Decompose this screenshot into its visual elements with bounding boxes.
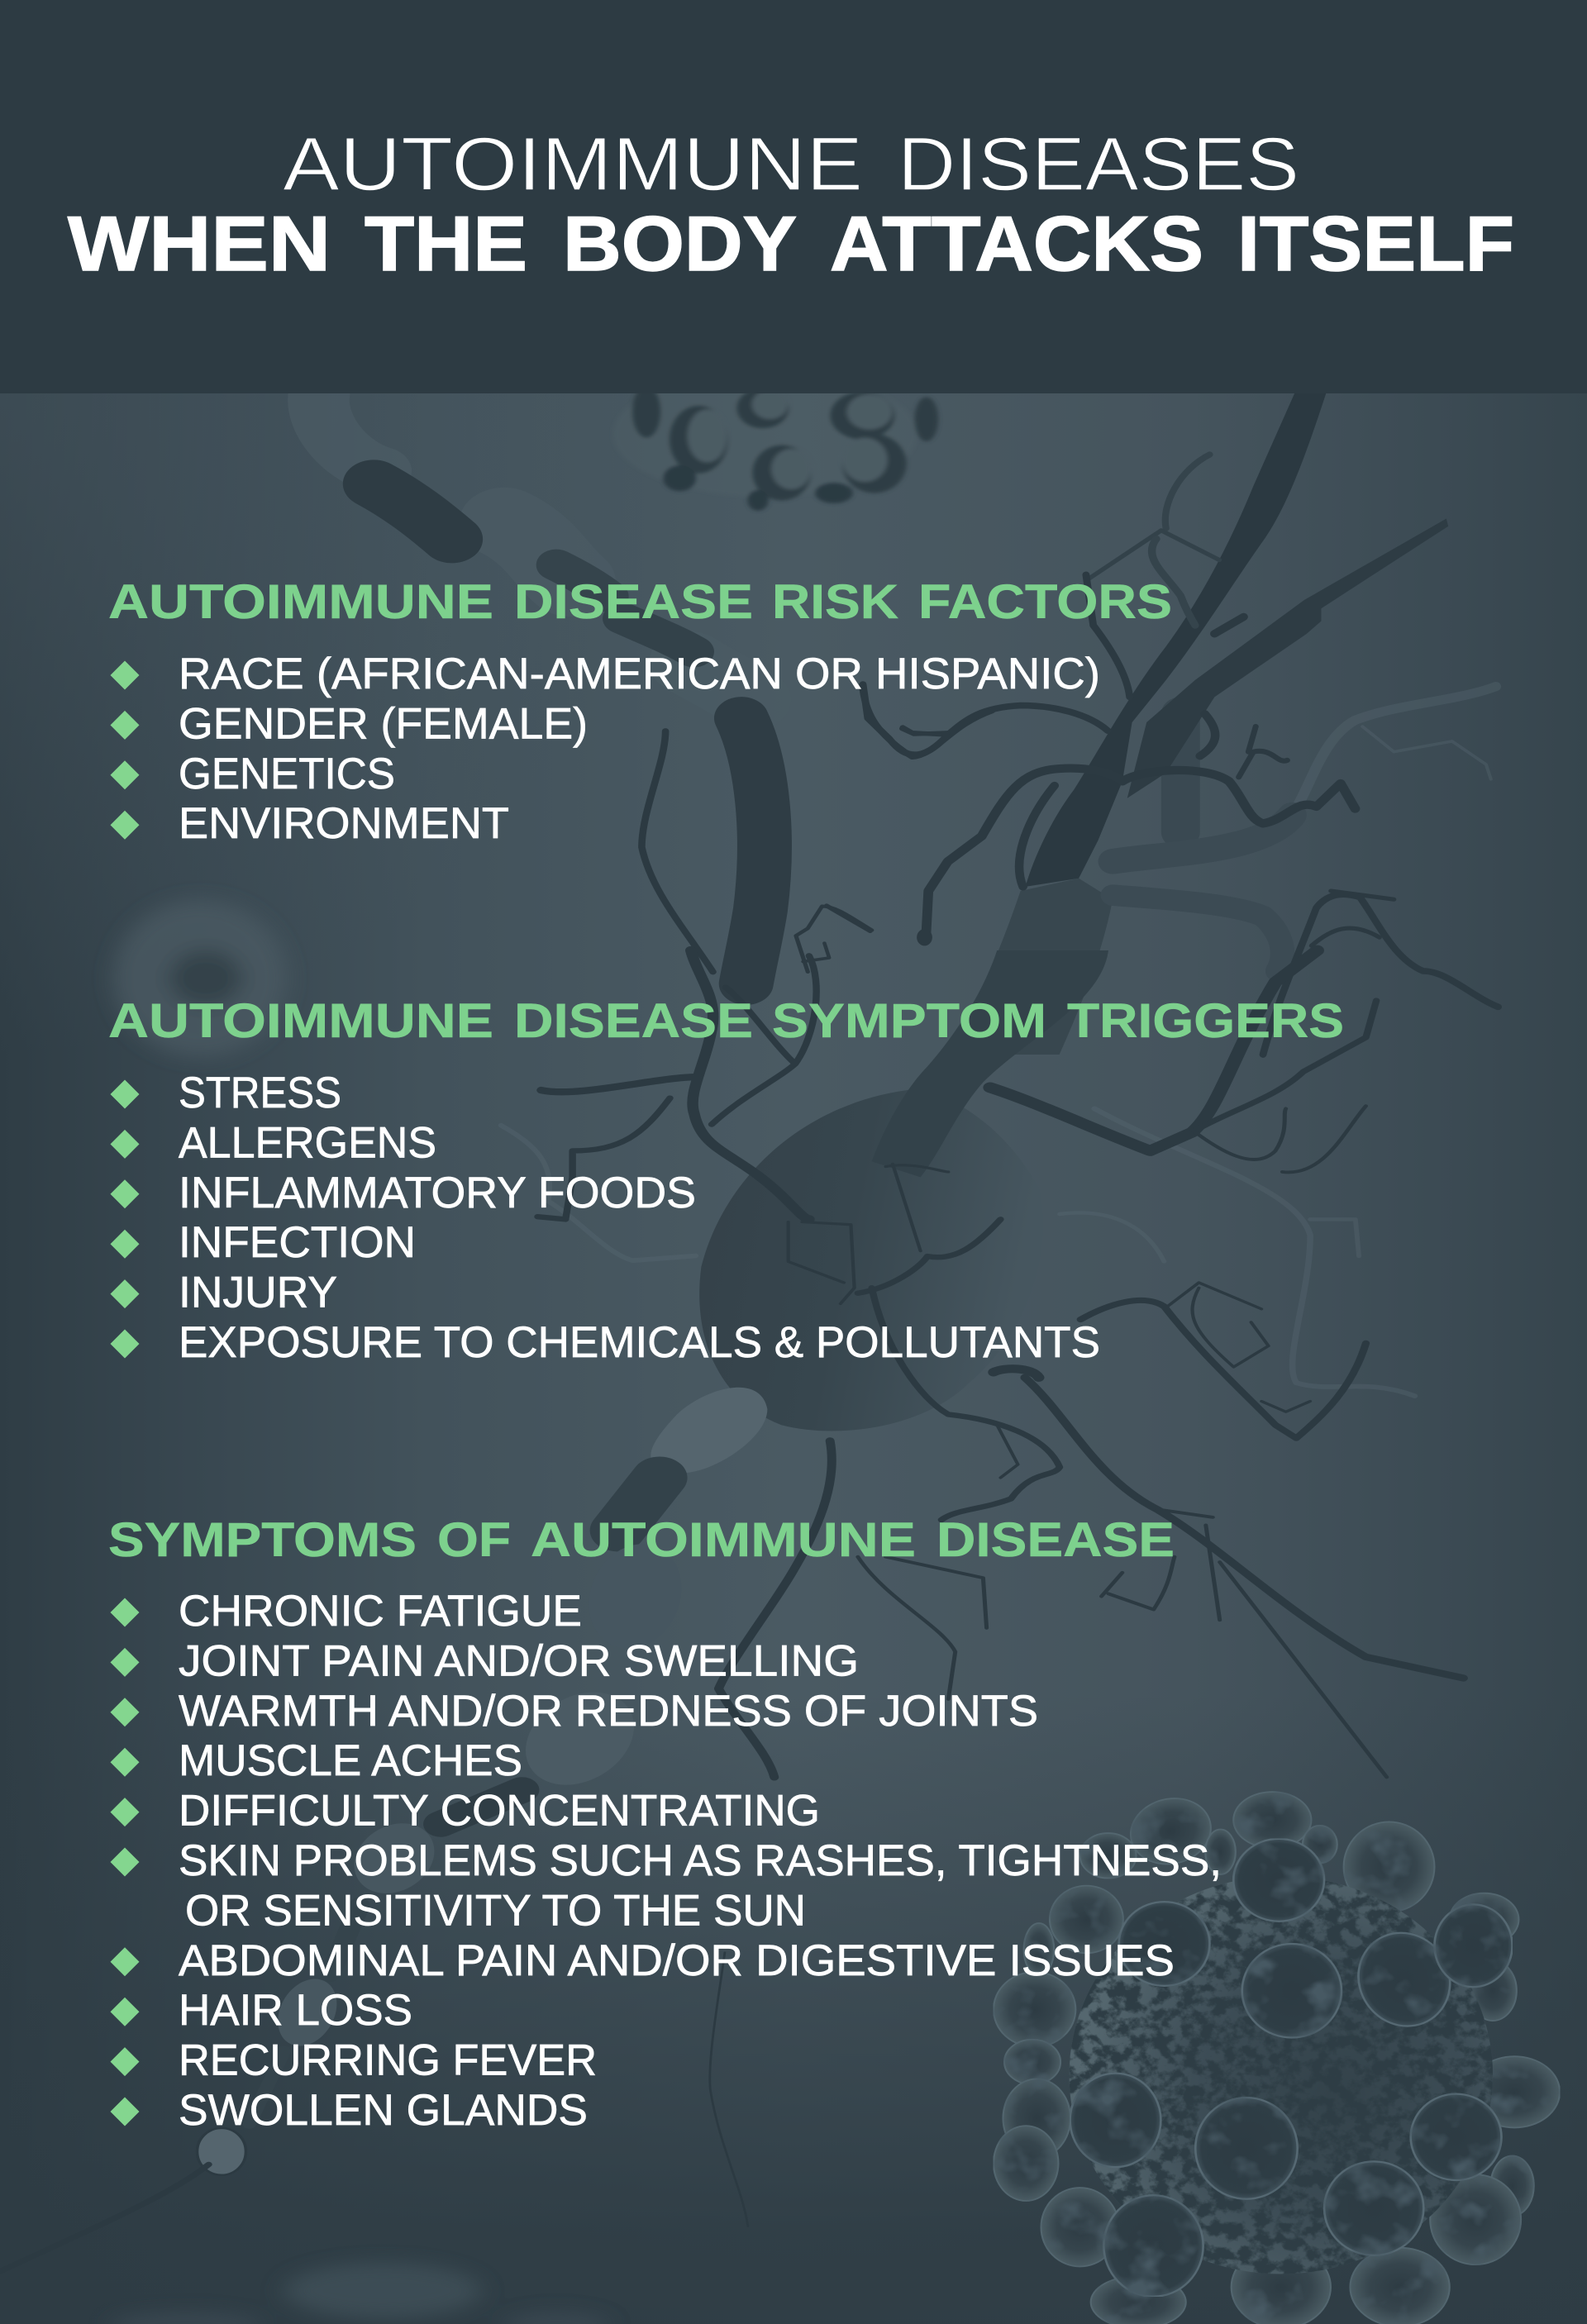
virus sphere — [1070, 1876, 1493, 2274]
item: SKIN PROBLEMS SUCH AS RASHES, TIGHTNESS, — [179, 1836, 1222, 1885]
item: HAIR LOSS — [179, 1986, 412, 2035]
front discs — [1070, 1839, 1513, 2297]
title line one: AUTOIMMUNE — [283, 122, 863, 207]
item: STRESS — [179, 1069, 341, 1117]
item: ABDOMINAL PAIN AND/OR DIGESTIVE ISSUES — [179, 1936, 1175, 1985]
item: INFECTION — [179, 1218, 416, 1267]
heading: symptoms: DISEASE — [936, 1513, 1175, 1567]
item: GENDER (FEMALE) — [179, 699, 588, 748]
item: OR SENSITIVITY TO THE SUN — [185, 1886, 806, 1935]
title line two — [68, 200, 1514, 287]
item: DIFFICULTY CONCENTRATING — [179, 1787, 820, 1836]
item: EXPOSURE TO CHEMICALS & POLLUTANTS — [179, 1318, 1100, 1367]
heading: risk factors — [108, 575, 1172, 629]
item: RECURRING FEVER — [179, 2036, 597, 2085]
title line two: BODY — [563, 200, 797, 287]
heading: risk factors: RISK — [772, 575, 898, 629]
capsule: beside heading — [579, 1539, 692, 1655]
dark rod: below capsule — [617, 1478, 660, 1531]
heading: symptoms: SYMPTOMS — [108, 1513, 417, 1567]
heading: symptoms: OF — [437, 1513, 511, 1567]
heading: symptom triggers: DISEASE — [514, 994, 753, 1048]
blurred virus: top — [613, 371, 938, 511]
header band — [0, 0, 1587, 393]
item — [111, 1836, 1222, 1935]
item: WARMTH AND/OR REDNESS OF JOINTS — [179, 1687, 1038, 1736]
item — [111, 1269, 337, 1317]
item: MUSCLE ACHES — [179, 1736, 522, 1785]
item: GENETICS — [179, 750, 395, 798]
list: symptoms — [111, 1587, 1222, 2135]
title line two: THE — [365, 200, 527, 287]
title line two: WHEN — [68, 200, 331, 287]
neuron cell body — [699, 1088, 1043, 1431]
central trunk and dendrites — [538, 950, 1463, 1777]
section: risk factors — [108, 575, 1172, 848]
list: symptom triggers — [111, 1069, 1100, 1367]
blurred virus: bottom — [110, 2263, 609, 2324]
title line two: ITSELF — [1237, 200, 1514, 287]
item: ALLERGENS — [179, 1118, 436, 1167]
main axon — [827, 393, 1499, 1055]
list: risk factors — [111, 650, 1100, 848]
heading: symptom triggers: SYMPTOM — [772, 994, 1046, 1048]
heading: symptom triggers: AUTOIMMUNE — [108, 994, 493, 1048]
title — [68, 122, 1514, 287]
blurred virus: left — [113, 900, 288, 1056]
title line one: DISEASES — [898, 122, 1299, 207]
pale tendrils — [501, 687, 1496, 1396]
item: SWOLLEN GLANDS — [179, 2086, 588, 2135]
vessels and trunks — [943, 714, 1292, 1055]
back spikes — [994, 1786, 1560, 2324]
capsule chain: lower left — [0, 1678, 748, 2271]
item: INFLAMMATORY FOODS — [179, 1169, 696, 1217]
capsule: below cell body — [651, 1388, 767, 1473]
segmented rod: upper left — [318, 393, 992, 983]
heading: risk factors: AUTOIMMUNE — [108, 575, 493, 629]
heading: symptoms — [108, 1513, 1175, 1567]
item: INJURY — [179, 1269, 337, 1317]
item — [111, 1069, 341, 1117]
item: CHRONIC FATIGUE — [179, 1587, 582, 1636]
item: ENVIRONMENT — [179, 799, 509, 848]
section: symptom triggers — [108, 994, 1344, 1367]
title line one — [283, 122, 1299, 207]
heading: symptoms: AUTOIMMUNE — [531, 1513, 916, 1567]
title line two: ATTACKS — [830, 200, 1203, 287]
section: symptoms — [108, 1513, 1222, 2135]
heading: risk factors: FACTORS — [918, 575, 1172, 629]
virus: bottom right — [994, 1786, 1560, 2324]
item: RACE (AFRICAN-AMERICAN OR HISPANIC) — [179, 650, 1100, 698]
heading: symptom triggers — [108, 994, 1344, 1048]
heading: risk factors: DISEASE — [514, 575, 753, 629]
heading: symptom triggers: TRIGGERS — [1067, 994, 1344, 1048]
item: JOINT PAIN AND/OR SWELLING — [179, 1636, 859, 1685]
